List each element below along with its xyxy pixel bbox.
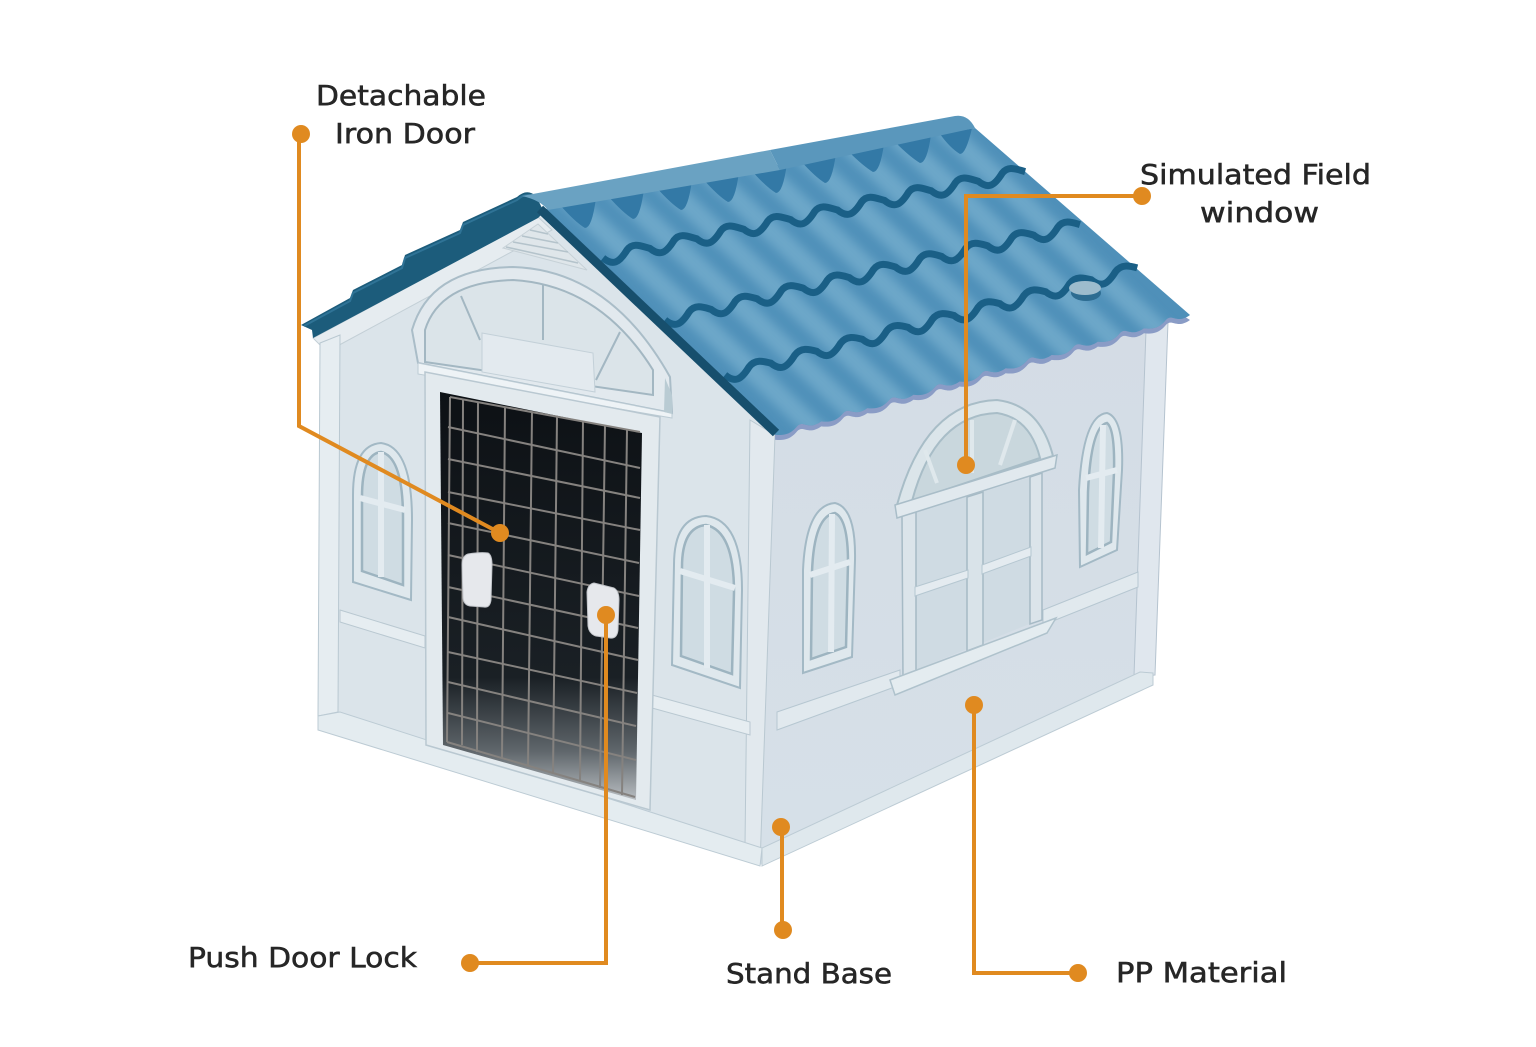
front wall xyxy=(313,213,775,866)
label text: Push Door Lock xyxy=(188,941,418,974)
tile ribs xyxy=(561,136,1166,428)
gable vent xyxy=(503,224,587,270)
callout: detachable iron door xyxy=(292,79,509,542)
side wall xyxy=(760,305,1168,866)
front right corner post xyxy=(745,420,775,865)
label text: Detachable xyxy=(316,79,486,112)
side wall right corner post xyxy=(1134,322,1168,676)
callout: simulated field window xyxy=(957,158,1371,474)
side wall band xyxy=(777,572,1138,730)
roof vent cap xyxy=(1069,281,1101,301)
pediment arch xyxy=(412,267,672,418)
tile row 2 xyxy=(665,222,1080,324)
front left window xyxy=(353,443,412,600)
label text: window xyxy=(1200,196,1319,229)
callout: pp material xyxy=(965,696,1287,989)
window right jamb xyxy=(1030,473,1042,624)
side right window xyxy=(1079,413,1122,567)
window cross bars xyxy=(915,547,1031,596)
label text: Simulated Field xyxy=(1140,158,1371,191)
front right window xyxy=(672,516,742,688)
side base strip xyxy=(762,672,1153,866)
front band right xyxy=(652,695,750,735)
leader line xyxy=(299,134,500,533)
window center mullion xyxy=(967,492,983,651)
window panes xyxy=(915,477,1032,670)
tile row 1 xyxy=(603,168,1025,262)
label text: Stand Base xyxy=(726,957,892,990)
front fascia under roof trim xyxy=(313,217,552,350)
label text xyxy=(316,79,486,150)
label text: PP Material xyxy=(1116,956,1287,989)
window left jamb xyxy=(902,512,916,680)
label text: Iron Door xyxy=(335,117,476,150)
roof xyxy=(522,116,1190,440)
infographic canvas xyxy=(190,84,1369,984)
front band left xyxy=(340,610,425,648)
left door latch xyxy=(462,553,492,607)
right door latch xyxy=(587,583,619,638)
tile row 3 xyxy=(725,266,1137,379)
window lintel xyxy=(895,455,1057,518)
callout: stand base xyxy=(726,818,892,990)
dog house illustration xyxy=(301,110,1241,866)
callout: push door lock xyxy=(188,606,615,974)
roof tile plane xyxy=(546,128,1190,435)
tile rows xyxy=(603,168,1137,379)
label text xyxy=(1140,158,1371,229)
roof eave underside xyxy=(775,295,1190,440)
door grid horizontals xyxy=(447,397,640,797)
front base strip xyxy=(318,712,762,866)
side left window xyxy=(803,503,855,673)
iron door xyxy=(440,392,642,800)
front roof trim xyxy=(301,192,544,338)
window arch xyxy=(897,400,1053,505)
front left corner post xyxy=(318,335,340,716)
ridge scallops xyxy=(560,128,972,228)
window sill xyxy=(890,618,1056,695)
large side window xyxy=(890,400,1057,695)
roof front rake edge xyxy=(540,209,776,433)
roof ridge cap xyxy=(522,116,975,210)
door frame xyxy=(425,372,660,810)
